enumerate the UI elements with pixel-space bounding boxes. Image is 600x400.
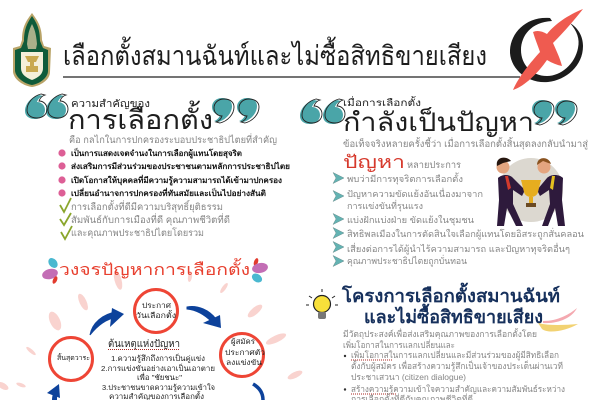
circle: election day announced: วันเลือกตั้ง <box>136 310 176 320</box>
list: pink bullets <box>58 147 290 198</box>
body text: เพิ่มโอกาสในการแลกเปลี่ยนและมีส่วนร่วมของผู้มีสิทธิเลือก <box>351 349 559 361</box>
list: problems <box>333 172 584 267</box>
circle: end of term <box>50 338 92 380</box>
circle: end of term: สิ้นสุดวาระ <box>57 353 90 362</box>
text: หลายประการ <box>407 160 461 171</box>
heading: วงจรปัญหาการเลือกตั้ง <box>59 258 250 279</box>
decoration: swooshes <box>538 308 578 331</box>
subheading: ความสำคัญของ <box>71 99 150 110</box>
list: green checks: การเลือกตั้งที่ดีมีความบริสุทธิ์ยุติธรรม <box>71 199 223 213</box>
title: เลือกตั้งสมานฉันท์และไม่ซื้อสิทธิขายเสียง <box>63 36 487 71</box>
heading: และไม่ซื้อสิทธิขายเสียง <box>364 303 543 327</box>
heading: การเลือกตั้ง <box>68 100 213 135</box>
arrow: election day to candidates <box>187 307 221 328</box>
centre text: root causes: 1.ความรู้สึกถึงการเป็นคู่แข่ง <box>111 353 205 363</box>
arrow: candidates downward <box>253 384 263 400</box>
list: problems: แบ่งฝักแบ่งฝ่าย ขัดแย้งในชุมชน <box>347 215 474 226</box>
intro text: ข้อเท็จจริงหลายครั้งชี้ว่า เมื่อการเลือกตั้งสิ้นสุดลงกลับนำมาสู่ <box>343 137 588 150</box>
circle: candidates: ผู้สมัคร <box>231 337 255 346</box>
icon: opening quotes left <box>25 94 68 119</box>
highlighted word: ปัญหา <box>343 152 405 172</box>
icon: opening quotes right <box>300 99 345 124</box>
body text: เพิ่มโอกาสในการแลกเปลี่ยนและ <box>343 339 455 350</box>
illustration: two men fighting over trophy <box>496 158 565 226</box>
centre text: root causes: ต้นเหตุแห่งปัญหา <box>108 338 180 350</box>
centre text: root causes <box>101 338 215 400</box>
body text: สร้างความรู้ความเข้าใจความสำคัญและความสัมพันธ์ระหว่าง <box>351 384 565 395</box>
list: green checks <box>60 198 230 239</box>
circle: election day announced: ประกาศ <box>142 301 171 310</box>
icon: red X in ink circle <box>510 9 583 90</box>
list: problems: การแข่งขันที่รุนแรง <box>347 199 423 212</box>
circle: candidates: ประกาศตัว <box>225 348 265 357</box>
list: problems: สิทธิพลเมืองในการตัดสินใจเลือกผู้แทนโดยอิสระถูกสั่นคลอน <box>347 227 584 240</box>
list: pink bullets: เป็นการแสดงเจตจำนงในการเลือกผู้แทนโดยสุจริต <box>71 147 242 159</box>
icon: closing quotes left <box>212 98 259 123</box>
list: problems: คุณภาพประชาธิปไตยถูกบั่นทอน <box>347 254 467 267</box>
definition text: คือ กลไกในการปกครองระบอบประชาธิปไตยที่สำคัญ <box>69 133 277 146</box>
subheading: เมื่อการเลือกตั้ง <box>343 96 421 109</box>
list: green checks: สัมพันธ์กับการเมืองที่ดี คุณภาพชีวิตที่ดี <box>71 213 230 226</box>
icon: closing quotes right <box>532 100 577 125</box>
list: problems: เสี่ยงต่อการได้ผู้นำไร้ความสามารถ และปัญหาทุจริตอื่นๆ <box>347 242 570 255</box>
panel: election problem cycle <box>0 256 304 400</box>
decoration: left drops <box>41 256 60 284</box>
circle: candidates: ลงแข่งขัน <box>226 358 262 367</box>
list: pink bullets: ส่งเสริมการมีส่วนร่วมของประชาชนตามหลักการประชาธิปไตย <box>71 161 290 171</box>
list: green checks: และคุณภาพประชาธิปไตยโดยรวม <box>71 227 204 239</box>
decorative petals <box>0 269 304 392</box>
icon: emblem <box>13 13 51 87</box>
body text: ตั้งกับผู้สมัคร เพื่อสร้างความรู้สึกเป็นเจ้าของประเด็นผ่านเวที <box>351 360 563 372</box>
body text: ประชาเสวนา (citizen dialogue) <box>351 372 466 382</box>
centre text: root causes: 3.ประชาชนขาดความรู้ความเข้าใจ <box>102 383 215 392</box>
circle: election day announced <box>134 290 178 332</box>
list: problems: พบว่ามีการทุจริตการเลือกตั้ง <box>347 172 463 185</box>
heading: กำลังเป็นปัญหา <box>343 106 534 137</box>
centre text: root causes: เพื่อ "ชัยชนะ" <box>137 372 182 382</box>
body text: มีวัตถุประสงค์เพื่อส่งเสริมคุณภาพของการเลือกตั้งโดย <box>343 328 537 340</box>
decoration: right drops <box>250 258 269 284</box>
centre text: root causes: 2.การแข่งขันอย่างเอาเป็นเอาตาย <box>101 363 215 373</box>
list: pink bullets: เปิดโอกาสให้บุคคลที่มีความรู้ความสามารถได้เข้ามาปกครอง <box>71 174 282 186</box>
list: pink bullets: เปลี่ยนอำนาจการปกครองที่ทันสมัยและเป็นไปอย่างสันติ <box>71 187 266 198</box>
heading: โครงการเลือกตั้งสมานฉันท์ <box>341 282 560 306</box>
panel: importance of elections <box>25 94 290 239</box>
list: problems: ปัญหาความขัดแย้งอันเนื่องมาจาก <box>347 187 483 199</box>
body text <box>343 328 565 400</box>
panel: elections becoming a problem <box>300 96 588 267</box>
icon: light bulb <box>306 289 338 319</box>
panel: reconciliation project <box>306 282 578 400</box>
circle: candidates <box>220 334 265 376</box>
arrow: upward to end of term <box>47 384 60 400</box>
heading <box>341 282 560 327</box>
arrow: end of term to election day <box>90 308 124 335</box>
